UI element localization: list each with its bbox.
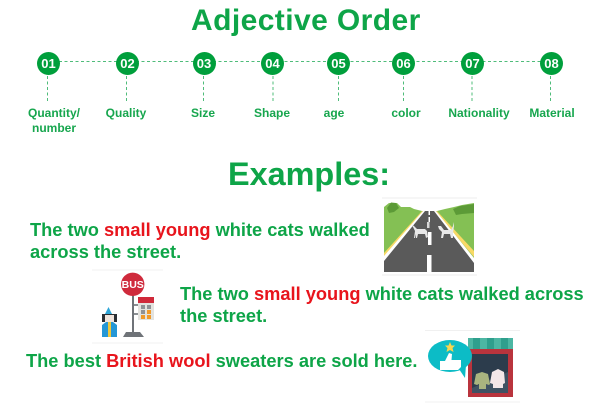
label: color: color: [391, 106, 421, 120]
step 05: [327, 52, 350, 75]
step 08: [540, 52, 563, 75]
step 05: 05: [331, 56, 346, 71]
label: material: Material: [529, 106, 575, 120]
step 04: [261, 52, 284, 75]
label: quantity/number: [28, 106, 80, 134]
example sentence 1: [30, 219, 370, 262]
step 06: 06: [396, 56, 411, 71]
example sentence 1: The two small young white cats walked: [30, 219, 370, 240]
step 04: 04: [265, 56, 280, 71]
label: size: Size: [191, 106, 215, 120]
heading: examples: Examples:: [228, 156, 390, 192]
label: shape: Shape: [254, 106, 290, 120]
step 07: [461, 52, 484, 75]
shop and thumbs-up image: [425, 330, 520, 402]
label: nationality: Nationality: [448, 106, 510, 120]
icon label: bus: BUS: [122, 279, 144, 291]
step 07: 07: [465, 56, 480, 71]
example sentence 2: [180, 283, 584, 326]
step 03: 03: [197, 56, 211, 71]
step 06: [392, 52, 415, 75]
step 03: [192, 52, 216, 75]
step 08: 08: [544, 56, 559, 71]
example sentence 2: the street.: [180, 305, 267, 326]
step 01: 01: [41, 56, 56, 71]
timeline connectors: [47, 61, 551, 101]
title: Adjective Order: [191, 4, 421, 37]
label: quantity/number: Quantity/: [28, 106, 80, 120]
step 02: 02: [120, 56, 135, 71]
label: quantity/number: number: [32, 120, 76, 134]
step 01: [37, 52, 60, 75]
example sentence 2: The two small young white cats walked across: [180, 283, 584, 304]
example sentence 3: The best British wool sweaters are sold here.: [26, 350, 418, 371]
label: age: age: [324, 106, 344, 120]
label: quality: Quality: [106, 106, 146, 120]
example sentence 1: across the street.: [30, 241, 181, 262]
step 02: [116, 52, 139, 75]
road with cats image: [382, 198, 477, 276]
bus stop and figure image: [92, 270, 163, 344]
